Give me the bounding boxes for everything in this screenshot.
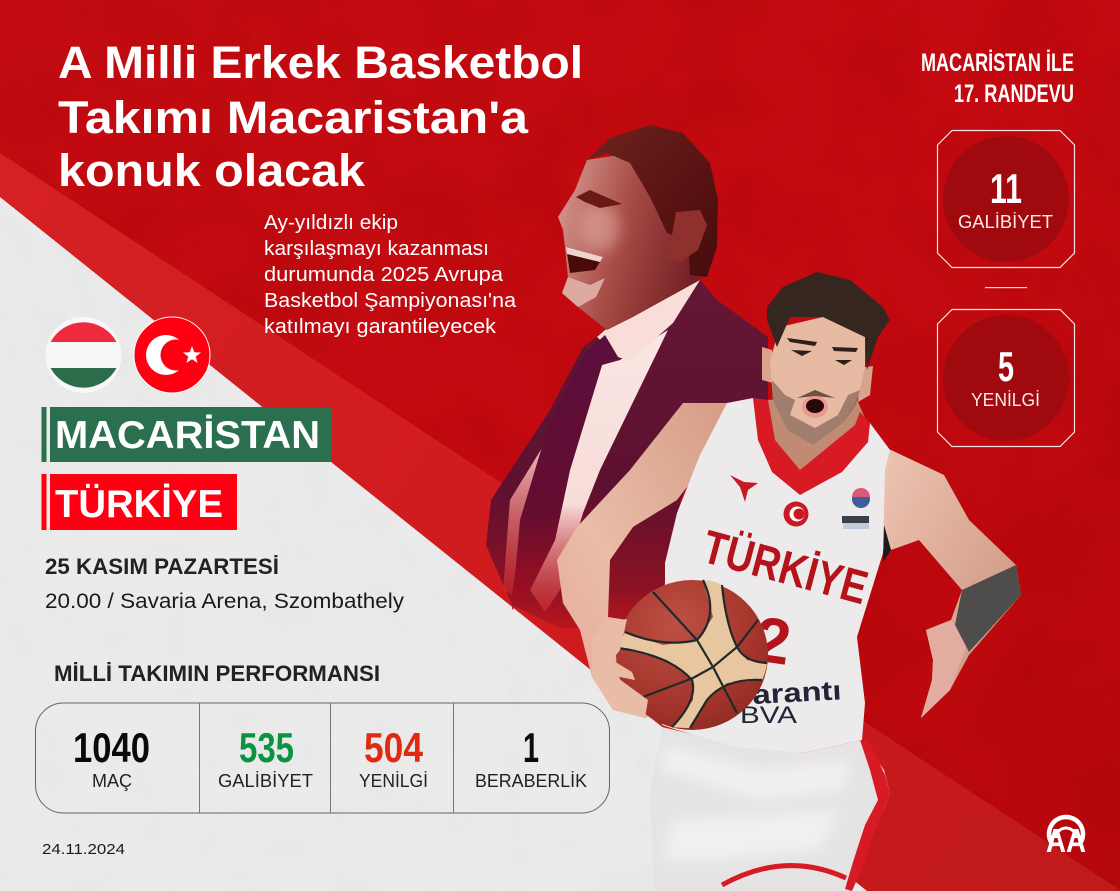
coach sleeve highlight [503, 430, 553, 595]
player left arm [557, 403, 727, 718]
icon: agency logo: AA [1046, 822, 1086, 859]
player jersey [662, 398, 890, 753]
player hair [767, 272, 890, 370]
label: Macaristan: MACARİSTAN [55, 414, 320, 457]
heading: head to head [921, 49, 1074, 108]
stat: matches: 1040 [73, 724, 150, 771]
title: A Milli Erkek Basketbol [58, 37, 583, 88]
shorts hem [722, 866, 846, 885]
icon: Hungary flag [46, 317, 122, 393]
coach beard [562, 277, 605, 307]
coach mouth [566, 247, 603, 273]
label: Türkiye: TÜRKİYE [55, 483, 223, 526]
player hand [592, 619, 648, 718]
stat: losses: YENİLGİ [359, 771, 428, 791]
stat: wins: 535 [239, 724, 294, 771]
coach ear [667, 210, 707, 262]
stat: draws [475, 724, 587, 791]
coach cheek highlight [580, 204, 620, 252]
coach brow and eye [576, 190, 622, 208]
stat: losses: 504 [364, 724, 424, 771]
match date: 25 KASIM PAZARTESİ [45, 554, 279, 579]
player beard [772, 380, 860, 445]
armhole shadow [883, 525, 891, 562]
player shorts [650, 727, 890, 891]
intro paragraph [264, 212, 517, 338]
right hand [921, 620, 969, 718]
jersey collar [753, 398, 870, 495]
panel: head to head wins: 11 [990, 165, 1022, 212]
stat: matches [73, 724, 150, 791]
title: Takımı Macaristan'a [58, 92, 529, 143]
coach head [558, 150, 712, 330]
intro paragraph: Basketbol Şampiyonası'na [264, 290, 517, 312]
player right arm [878, 445, 1021, 718]
player ears [762, 347, 873, 402]
date stamp: 24.11.2024 [42, 841, 125, 858]
coach hair [587, 125, 718, 277]
panel: head to head wins [938, 130, 1074, 268]
label: Türkiye [42, 474, 237, 530]
panel: team performance [36, 703, 610, 813]
intro paragraph: karşılaşmayı kazanması [264, 238, 489, 260]
title [58, 37, 583, 196]
stat: wins [218, 724, 313, 791]
photo: player: BVA [740, 702, 797, 729]
jersey number: 2 [750, 603, 795, 679]
stat: wins: GALİBİYET [218, 771, 313, 791]
coach shirt [530, 330, 668, 612]
shorts side stripe [845, 740, 890, 891]
intro paragraph: durumunda 2025 Avrupa [264, 264, 504, 286]
coach collar [597, 280, 700, 361]
jersey wordmark: TÜRKİYE [697, 519, 873, 614]
stat: matches: MAÇ [92, 771, 132, 791]
divider [985, 287, 1027, 288]
basketball [616, 580, 768, 730]
panel: head to head losses: 5 [998, 343, 1014, 390]
panel: head to head losses: YENİLGİ [971, 390, 1040, 410]
performance heading: MİLLİ TAKIMIN PERFORMANSI [54, 661, 380, 686]
panel: head to head losses [938, 310, 1074, 446]
coach tie [512, 335, 618, 610]
shorts folds [660, 745, 850, 860]
jersey logo [730, 475, 758, 502]
stat: draws: 1 [523, 724, 539, 771]
photo: coach [486, 125, 768, 628]
heading: head to head: 17. RANDEVU [954, 80, 1074, 108]
coach suit [486, 280, 768, 628]
match time and venue: 20.00 / Savaria Arena, Szombathely [45, 590, 405, 613]
intro paragraph: Ay-yıldızlı ekip [264, 212, 398, 234]
eurobasket badge [842, 488, 870, 529]
player mouth [802, 396, 828, 418]
background: light paper wedge [0, 197, 867, 891]
player neck [766, 395, 868, 493]
arm tattoo [955, 565, 1021, 652]
player brows and eyes [787, 338, 858, 365]
title: konuk olacak [58, 145, 366, 196]
stat: losses [359, 724, 428, 791]
player moustache [797, 390, 835, 398]
icon: Türkiye flag [134, 317, 210, 393]
jersey crescent badge [784, 502, 808, 526]
panel: head to head wins: GALİBİYET [958, 212, 1053, 232]
stat: draws: BERABERLİK [475, 771, 587, 791]
photo: player [557, 272, 1021, 891]
sponsor text: arantı [752, 675, 842, 710]
player face [770, 317, 865, 445]
intro paragraph: katılmayı garantileyecek [264, 316, 497, 338]
